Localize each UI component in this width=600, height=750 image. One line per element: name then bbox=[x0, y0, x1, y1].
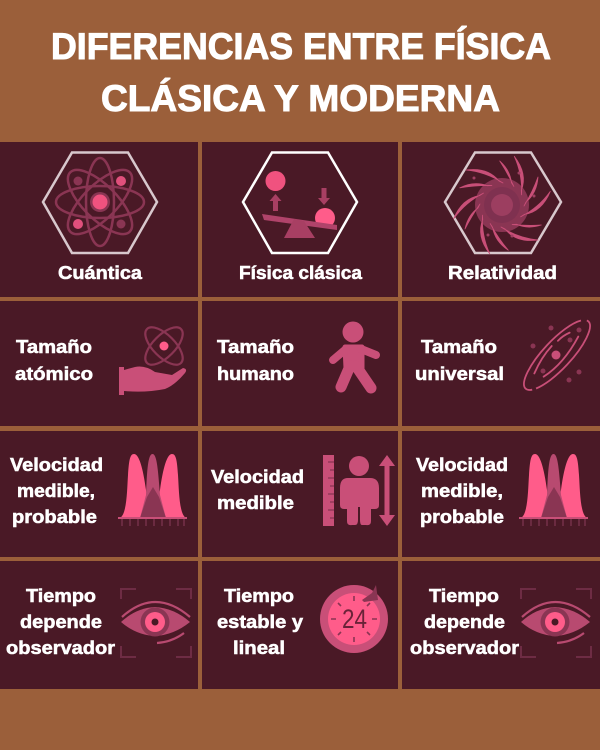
text: tiempo estable bbox=[217, 585, 304, 658]
panel: Relatividad header bbox=[402, 142, 600, 297]
text: velocidad probable: medible, bbox=[17, 480, 95, 501]
text: tiempo observador: Tiempo bbox=[26, 585, 96, 606]
text: velocidad probable bbox=[10, 454, 103, 527]
panel: Velocidad medible (centre) bbox=[202, 431, 398, 557]
text: tiempo estable: Tiempo bbox=[224, 585, 294, 606]
icon: eye in viewfinder bbox=[121, 589, 191, 657]
icon: galaxy orbit bbox=[515, 312, 599, 398]
icon: probability curves bbox=[118, 454, 187, 526]
text: tiempo observador: observador bbox=[6, 637, 115, 658]
text: Tamaño atómico: atómico bbox=[15, 363, 93, 384]
text: Tamaño humano: humano bbox=[217, 363, 294, 384]
title: CLÁSICA Y MODERNA bbox=[101, 78, 500, 119]
panel: Cuántica header bbox=[0, 142, 198, 297]
text: velocidad probable: Velocidad bbox=[416, 454, 508, 475]
text: tiempo observador: Tiempo bbox=[429, 585, 499, 606]
text: tiempo observador bbox=[6, 585, 115, 658]
panel: Tamaño universal bbox=[402, 301, 600, 426]
title bbox=[51, 26, 551, 119]
text: velocidad probable: Velocidad bbox=[10, 454, 103, 475]
text: Tamaño atómico bbox=[15, 336, 93, 384]
text: Tamaño universal bbox=[415, 336, 504, 384]
icon: eye in viewfinder bbox=[521, 589, 591, 657]
text: velocidad probable: probable bbox=[12, 506, 97, 527]
panel: Tiempo estable y lineal bbox=[202, 561, 398, 689]
panel: Tamaño humano bbox=[202, 301, 398, 426]
panel: Física clásica header bbox=[202, 142, 398, 297]
text: Tamaño humano: Tamaño bbox=[217, 336, 294, 357]
heading: Relatividad: Relatividad bbox=[448, 262, 557, 283]
heading: Cuántica: Cuántica bbox=[58, 262, 143, 283]
icon: atom in hexagon bbox=[43, 152, 157, 253]
text: Tamaño universal: Tamaño bbox=[421, 336, 497, 357]
text: Tamaño universal: universal bbox=[415, 363, 504, 384]
icon: walking person bbox=[333, 322, 376, 388]
text: velocidad medible bbox=[211, 466, 304, 513]
icon: seesaw in hexagon bbox=[243, 152, 357, 253]
icon: spiral galaxy in hexagon bbox=[445, 152, 561, 254]
text: tiempo observador: depende bbox=[424, 611, 505, 632]
icon: 24 hour clock bbox=[320, 585, 388, 653]
text: tiempo observador bbox=[410, 585, 519, 658]
heading: Física clásica: Física clásica bbox=[239, 262, 363, 283]
icon: probability curves bbox=[519, 454, 588, 526]
text: tiempo observador: depende bbox=[20, 611, 102, 632]
text: Tamaño humano bbox=[217, 336, 294, 384]
panel: Tiempo depende observador (right) bbox=[402, 561, 600, 689]
text: tiempo estable: estable y bbox=[217, 611, 304, 632]
icon: hand holding atom bbox=[119, 321, 189, 395]
panel: Velocidad medible, probable (left) bbox=[0, 431, 198, 557]
panel: Velocidad medible, probable (right) bbox=[402, 431, 600, 557]
text: velocidad probable bbox=[416, 454, 508, 527]
text: velocidad probable: probable bbox=[420, 506, 504, 527]
text: Tamaño atómico: Tamaño bbox=[16, 336, 92, 357]
text: velocidad medible: Velocidad bbox=[211, 466, 304, 487]
text: velocidad probable: medible, bbox=[421, 480, 503, 501]
panel: Tiempo depende observador (left) bbox=[0, 561, 198, 689]
panel: Tamaño atómico bbox=[0, 301, 198, 426]
icon: ruler, person and height arrow bbox=[323, 455, 395, 526]
icon: 24 hour clock: 24 bbox=[342, 604, 367, 634]
title: DIFERENCIAS ENTRE FÍSICA bbox=[51, 26, 551, 67]
text: tiempo observador: observador bbox=[410, 637, 519, 658]
text: velocidad medible: medible bbox=[217, 492, 294, 513]
text: tiempo estable: lineal bbox=[233, 637, 285, 658]
